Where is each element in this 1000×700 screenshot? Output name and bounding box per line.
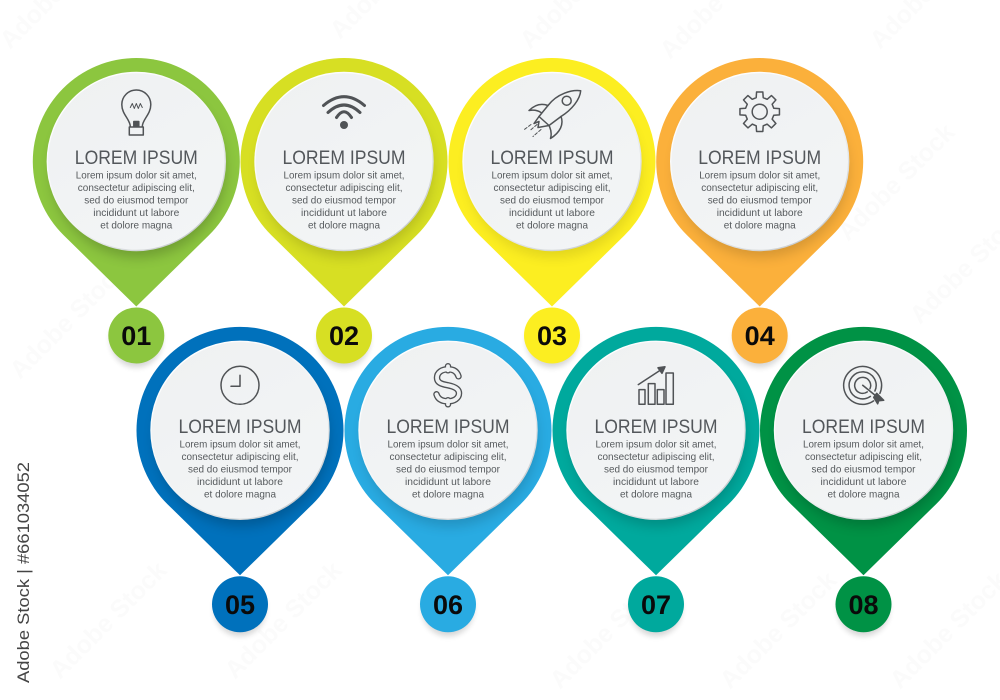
- icon: rocket: [523, 90, 581, 138]
- pin shape: [33, 58, 240, 306]
- heading: LOREM IPSUM: [802, 416, 925, 438]
- body text: [699, 170, 820, 232]
- icon: wifi: [324, 97, 364, 129]
- number badge: 06: [433, 590, 463, 620]
- number badge: [524, 308, 580, 368]
- heading: LOREM IPSUM: [75, 147, 198, 169]
- body text: Lorem ipsum dolor sit amet,: [284, 170, 404, 182]
- watermarks: Adobe Stock: [832, 118, 960, 246]
- inner circle: [774, 341, 952, 519]
- watermarks: Adobe Stock: [44, 556, 172, 684]
- body text: sed do eiusmod tempor: [500, 194, 604, 206]
- pin shape: [448, 58, 656, 306]
- pin 08: target: [760, 327, 967, 636]
- body text: et dolore magna: [724, 220, 796, 232]
- pin 04: settings: [656, 58, 863, 367]
- inner circle: [151, 341, 329, 519]
- number badge: [836, 576, 892, 636]
- icon: bar chart with arrow: [638, 367, 673, 404]
- body text: et dolore magna: [308, 220, 380, 232]
- number badge: [628, 576, 684, 636]
- inner circle: [567, 341, 745, 519]
- heading: LOREM IPSUM: [698, 147, 821, 169]
- body text: sed do eiusmod tempor: [708, 194, 812, 206]
- watermarks: Adobe Stock: [544, 566, 672, 694]
- body text: et dolore magna: [620, 488, 692, 500]
- number badge: 02: [329, 321, 359, 351]
- number badge: [732, 308, 788, 368]
- inner shadow: [360, 408, 540, 530]
- icon: gear: [740, 92, 779, 131]
- inner circle: [47, 72, 225, 250]
- body text: incididunt ut labore: [301, 207, 387, 219]
- inner shadow: [467, 154, 644, 260]
- stock id label: Adobe Stock | #661034052: [14, 462, 33, 683]
- body text: et dolore magna: [412, 488, 484, 500]
- body text: consectetur adipiscing elit,: [182, 451, 298, 463]
- watermarks: Adobe Stock: [219, 556, 347, 684]
- body text: consectetur adipiscing elit,: [78, 182, 195, 194]
- heading: LOREM IPSUM: [386, 416, 510, 438]
- body text: et dolore magna: [100, 220, 172, 232]
- heading: LOREM IPSUM: [282, 147, 406, 169]
- pin shape: [344, 327, 552, 575]
- inner circle: [255, 72, 433, 250]
- body text: et dolore magna: [516, 220, 588, 232]
- inner shadow: [671, 138, 852, 262]
- body text: et dolore magna: [828, 488, 900, 500]
- body text: [803, 438, 924, 500]
- body text: Lorem ipsum dolor sit amet,: [492, 170, 612, 182]
- body text: consectetur adipiscing elit,: [598, 451, 714, 463]
- pin shape: [240, 58, 448, 306]
- number badge: [316, 308, 372, 368]
- body text: [284, 170, 404, 232]
- heading: LOREM IPSUM: [490, 147, 614, 169]
- body text: sed do eiusmod tempor: [292, 194, 396, 206]
- body text: consectetur adipiscing elit,: [805, 451, 922, 463]
- body text: Lorem ipsum dolor sit amet,: [76, 170, 197, 182]
- inner shadow: [150, 402, 334, 531]
- pin 03: rocket: [448, 58, 656, 367]
- body text: [180, 438, 300, 500]
- inner shadow: [256, 142, 436, 261]
- body text: sed do eiusmod tempor: [604, 463, 708, 475]
- heading: LOREM IPSUM: [594, 416, 718, 438]
- body text: Lorem ipsum dolor sit amet,: [699, 170, 820, 182]
- pin shape: [136, 327, 344, 575]
- body text: sed do eiusmod tempor: [84, 194, 189, 206]
- body text: consectetur adipiscing elit,: [701, 182, 818, 194]
- body text: incididunt ut labore: [509, 207, 595, 219]
- heading: LOREM IPSUM: [178, 416, 302, 438]
- watermarks: Adobe Stock: [4, 256, 132, 384]
- body text: [76, 170, 197, 232]
- inner circle: [463, 72, 641, 250]
- icon: light bulb: [122, 90, 151, 135]
- pin 01: idea: [33, 58, 240, 367]
- body text: consectetur adipiscing elit,: [390, 451, 506, 463]
- body text: incididunt ut labore: [613, 476, 699, 488]
- body text: [492, 170, 612, 232]
- body text: consectetur adipiscing elit,: [494, 182, 610, 194]
- number badge: 04: [745, 321, 775, 351]
- pin 05: time: [136, 327, 344, 636]
- body text: consectetur adipiscing elit,: [286, 182, 402, 194]
- number badge: [108, 308, 164, 368]
- body text: [596, 438, 716, 500]
- inner shadow: [778, 419, 955, 529]
- icon: target with arrow: [844, 366, 884, 404]
- pin 02: wifi: [240, 58, 448, 367]
- body text: sed do eiusmod tempor: [396, 463, 500, 475]
- inner circle: [359, 341, 537, 519]
- number badge: [420, 576, 476, 636]
- icon: clock: [221, 366, 259, 404]
- body text: Lorem ipsum dolor sit amet,: [803, 438, 924, 450]
- body text: sed do eiusmod tempor: [812, 463, 916, 475]
- icon: dollar sign: [436, 366, 459, 404]
- body text: incididunt ut labore: [717, 207, 803, 219]
- inner shadow: [47, 132, 230, 262]
- body text: sed do eiusmod tempor: [188, 463, 292, 475]
- pin shape: [760, 327, 967, 575]
- body text: et dolore magna: [204, 488, 276, 500]
- body text: Lorem ipsum dolor sit amet,: [180, 438, 300, 450]
- pin shape: [552, 327, 760, 575]
- pin shape: [656, 58, 863, 306]
- number badge: 08: [848, 590, 879, 620]
- body text: incididunt ut labore: [93, 207, 179, 219]
- pin 06: money: [344, 327, 552, 636]
- body text: Lorem ipsum dolor sit amet,: [596, 438, 716, 450]
- number badge: 01: [121, 321, 151, 351]
- inner circle: [671, 72, 849, 250]
- number badge: 05: [225, 590, 255, 620]
- number badge: 03: [537, 321, 567, 351]
- number badge: [212, 576, 268, 636]
- number badge: 07: [641, 590, 671, 620]
- body text: incididunt ut labore: [820, 476, 907, 488]
- body text: incididunt ut labore: [405, 476, 491, 488]
- inner shadow: [570, 418, 748, 529]
- pin 07: growth: [552, 327, 760, 636]
- body text: [388, 438, 508, 500]
- body text: incididunt ut labore: [197, 476, 283, 488]
- watermarks: Adobe Stock: [714, 566, 842, 694]
- body text: Lorem ipsum dolor sit amet,: [388, 438, 508, 450]
